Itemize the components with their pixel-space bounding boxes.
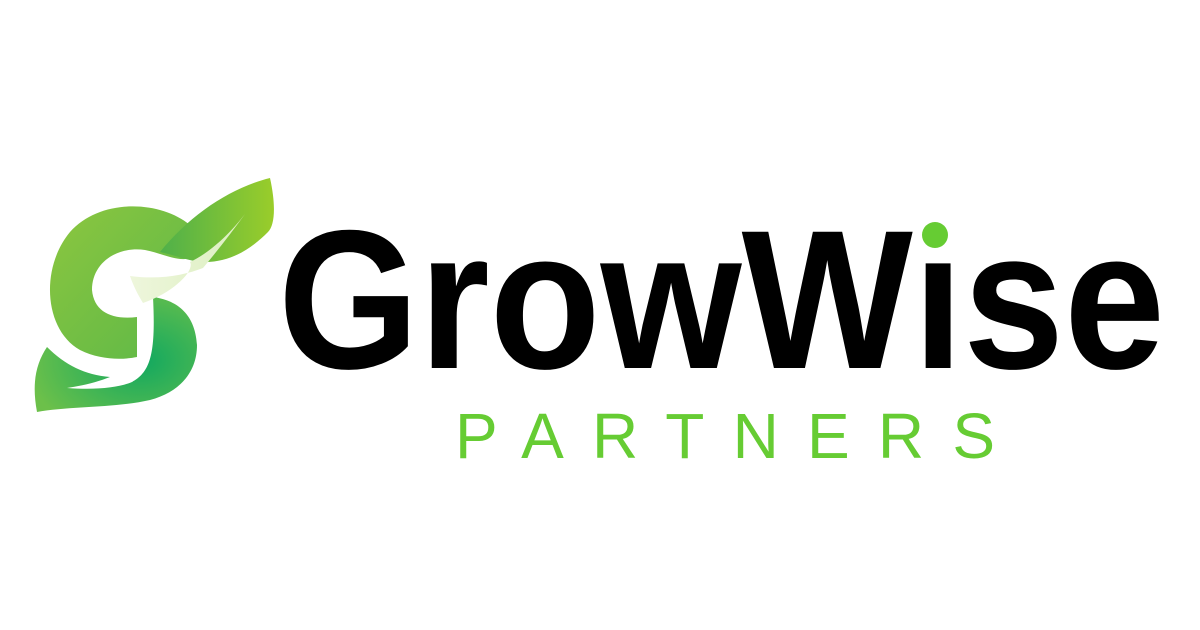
icon: upper S bowl	[50, 206, 192, 359]
icon: leaf vein highlight	[130, 214, 245, 303]
tagline: PARTNERS: PARTNERS	[455, 400, 995, 472]
icon: leaf	[160, 178, 274, 262]
icon: lower S tail	[35, 297, 197, 412]
icon: leaf S	[35, 178, 274, 412]
icon: green i dot	[922, 222, 948, 248]
